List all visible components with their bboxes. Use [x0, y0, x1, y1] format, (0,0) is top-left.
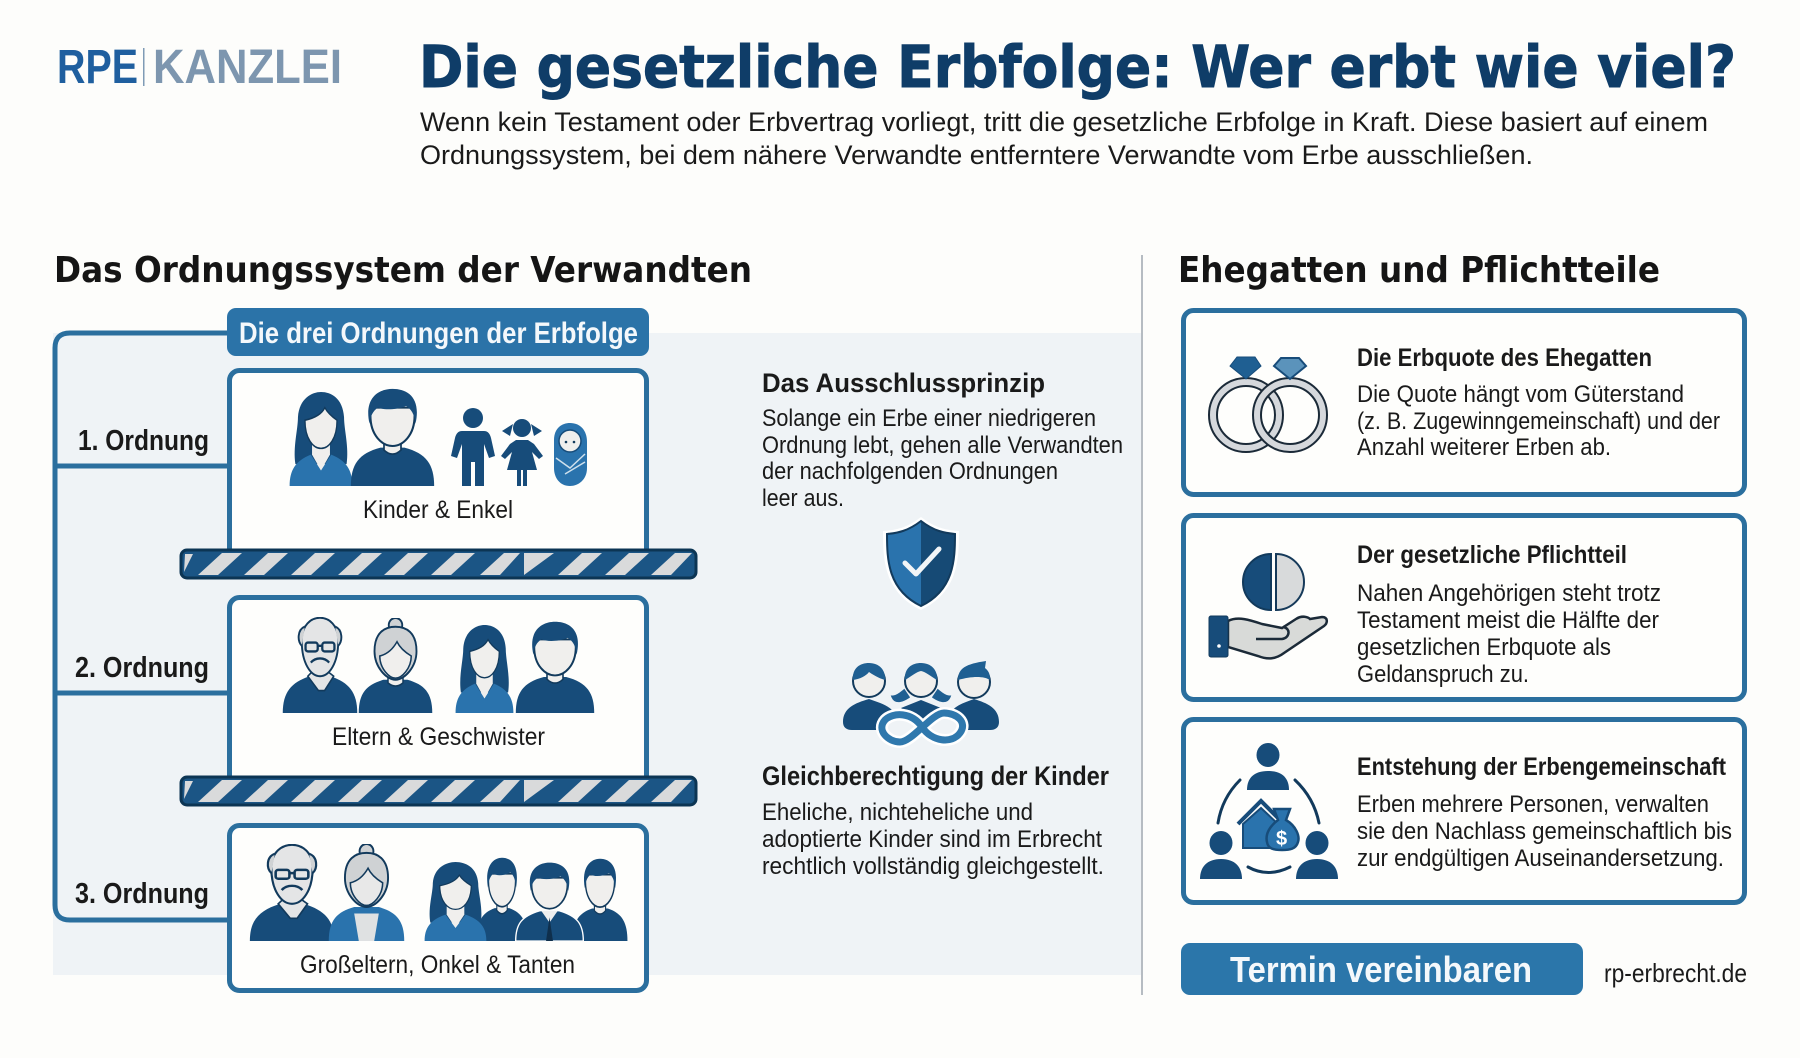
text: Die Erbquote des Ehegatten — [1357, 344, 1652, 372]
text block: equality of children: rechtlich vollständig gleichgestellt. — [762, 853, 1104, 880]
text: Die Quote hängt vom Güterstand — [1357, 381, 1684, 408]
header logo — [57, 41, 342, 94]
icon: baby — [554, 423, 587, 486]
icon: community of heirs — [1200, 743, 1338, 879]
panel: spouse share — [1184, 310, 1744, 494]
icon: brother — [516, 622, 594, 713]
icon: boy — [451, 408, 495, 486]
caption: Kinder & Enkel — [363, 496, 513, 524]
bracket connecting orders — [55, 333, 230, 920]
text: Entstehung der Erbengemeinschaft — [1357, 753, 1727, 781]
header logo: KANZLEI — [153, 41, 342, 94]
text block: exclusion principle: der nachfolgenden Ordnungen — [762, 458, 1058, 485]
text: zur endgültigen Auseinandersetzung. — [1357, 845, 1724, 872]
text block: equality of children — [762, 761, 1109, 880]
text: (z. B. Zugewinngemeinschaft) und der — [1357, 408, 1720, 435]
text: Geldanspruch zu. — [1357, 661, 1529, 688]
icon: shield — [883, 517, 959, 610]
order header — [227, 308, 649, 356]
icon: community of heirs: $ — [1276, 828, 1287, 850]
text block: equality of children: Eheliche, nichteheliche und — [762, 799, 1033, 826]
intro text: Ordnungssystem, bei dem nähere Verwandte entferntere Verwandte vom Erbe ausschließen. — [420, 140, 1533, 170]
text block: exclusion principle: leer aus. — [762, 485, 844, 512]
text: Nahen Angehörigen steht trotz — [1357, 580, 1661, 607]
heading: spouses: Ehegatten und Pflichtteile — [1178, 250, 1660, 291]
call-to-action button — [1181, 943, 1583, 995]
icon: grandmother — [329, 844, 404, 941]
icon: man — [351, 389, 434, 486]
text block: exclusion principle — [762, 368, 1123, 512]
text block: exclusion principle: Solange ein Erbe einer niedrigeren — [762, 405, 1096, 432]
icon: grandmother — [359, 618, 432, 713]
card: second order — [230, 598, 646, 798]
text: Der gesetzliche Pflichtteil — [1357, 541, 1627, 569]
text block: equality of children: adoptierte Kinder sind im Erbrecht — [762, 826, 1102, 853]
caption: Eltern & Geschwister — [332, 723, 545, 751]
label: 1. Ordnung: 1. Ordnung — [78, 425, 209, 457]
text block: exclusion principle: Ordnung lebt, gehen alle Verwandten — [762, 432, 1123, 459]
heading: order system: Das Ordnungssystem der Verwandten — [54, 250, 752, 291]
panel: background of order system — [53, 333, 1142, 975]
text — [1357, 753, 1732, 872]
call-to-action button: Termin vereinbaren — [1230, 949, 1532, 990]
icon: uncle 2 — [573, 859, 627, 941]
text — [1357, 541, 1661, 688]
card: first order — [230, 370, 646, 570]
barrier 2 — [181, 777, 696, 805]
icon: girl — [501, 419, 543, 486]
text: Anzahl weiterer Erben ab. — [1357, 434, 1611, 461]
text: sie den Nachlass gemeinschaftlich bis — [1357, 818, 1732, 845]
icon: rings — [1213, 357, 1323, 448]
text: gesetzlichen Erbquote als — [1357, 634, 1611, 661]
icon: children with infinity — [843, 661, 999, 742]
icon: aunt — [425, 862, 486, 941]
icon: grandfather — [250, 845, 334, 941]
icon: coin in hand — [1209, 554, 1327, 658]
icon: woman — [290, 392, 352, 486]
label: 3. Ordnung: 3. Ordnung — [75, 878, 209, 910]
caption: Großeltern, Onkel & Tanten — [300, 951, 575, 979]
panel: community of heirs — [1184, 720, 1744, 902]
barrier 1 — [181, 550, 696, 578]
card: third order — [230, 826, 646, 990]
text block: equality of children: Gleichberechtigung der Kinder — [762, 761, 1109, 791]
panel: compulsory share — [1184, 516, 1744, 700]
label: 2. Ordnung: 2. Ordnung — [75, 652, 209, 684]
icon: uncle in suit — [516, 863, 583, 941]
icon: grandfather — [283, 618, 357, 713]
text — [1357, 344, 1720, 461]
website: rp-erbrecht.de — [1604, 958, 1747, 988]
icon: sister — [456, 625, 513, 713]
header logo: RPE — [57, 41, 138, 94]
text block: exclusion principle: Das Ausschlussprinzip — [762, 368, 1045, 398]
order header: Die drei Ordnungen der Erbfolge — [239, 317, 638, 350]
intro text: Wenn kein Testament oder Erbvertrag vorliegt, tritt die gesetzliche Erbfolge in Kraft. Diese basiert auf einem — [420, 107, 1708, 137]
text: Erben mehrere Personen, verwalten — [1357, 791, 1709, 818]
intro text — [420, 107, 1708, 170]
text: Testament meist die Hälfte der — [1357, 607, 1659, 634]
icon: uncle — [477, 858, 527, 941]
